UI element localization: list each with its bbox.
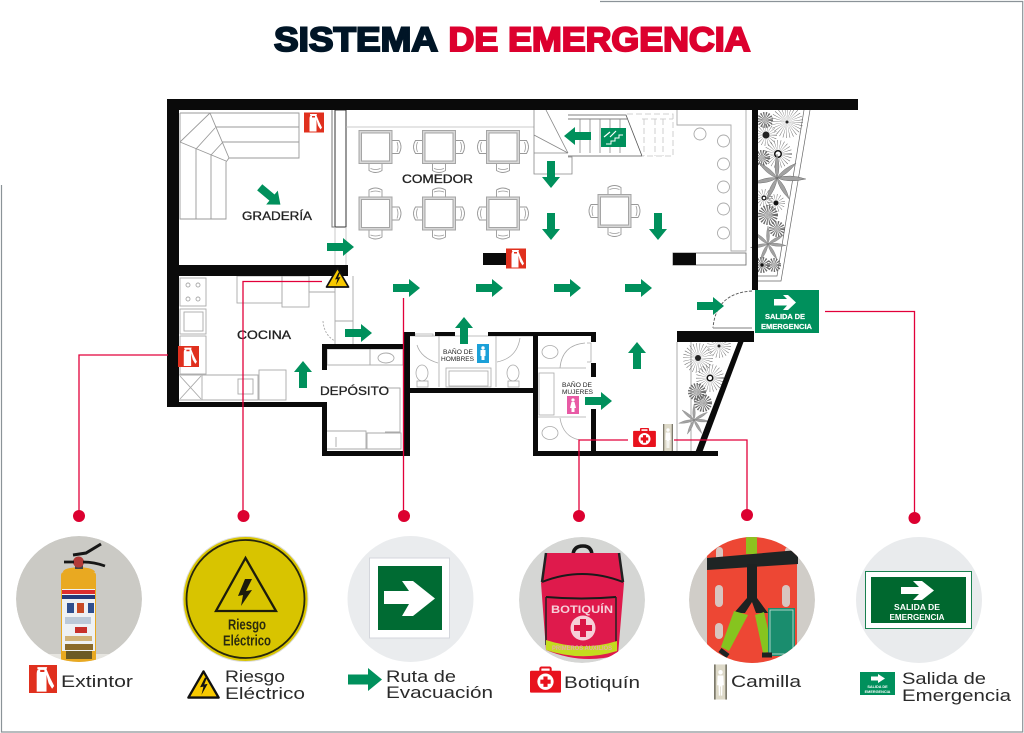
legend: ruta de evacuación: Ruta de xyxy=(386,668,456,686)
legend: botiquín: Botiquín xyxy=(564,674,640,692)
deposito fixtures xyxy=(327,349,403,449)
icon: extinguisher, gradería xyxy=(304,112,324,132)
photo: emergency exit sign xyxy=(856,537,982,663)
legend: riesgo eléctrico: Eléctrico xyxy=(225,685,305,703)
tables xyxy=(359,130,640,239)
photo: electrical risk sign xyxy=(183,536,308,662)
icon: men's restroom xyxy=(477,344,489,363)
legend: extintor xyxy=(29,665,134,693)
room labels: BAÑO DE xyxy=(443,347,474,356)
legend: riesgo eléctrico: Riesgo xyxy=(225,668,285,686)
legend: ruta de evacuación xyxy=(348,668,493,702)
photo: extinguisher xyxy=(16,536,142,664)
emergency exit sign xyxy=(755,290,819,333)
legend: camilla xyxy=(714,664,802,700)
photo: electrical risk sign: Riesgo xyxy=(228,616,266,634)
callout dots xyxy=(73,509,920,524)
icon: extinguisher, comedor xyxy=(506,248,526,268)
photo: first aid backpack: BOTIQUÍN xyxy=(551,603,613,616)
icon: stretcher xyxy=(663,424,673,451)
stairs xyxy=(534,110,673,174)
room labels: COCINA xyxy=(237,328,291,342)
photo: evacuation route sign xyxy=(348,536,474,662)
walls xyxy=(167,99,858,456)
comedor divider xyxy=(332,110,534,265)
icon: stairs exit sign xyxy=(601,128,626,147)
bathroom fixtures xyxy=(410,334,591,440)
legend: salida de emergencia: EMERGENCIA xyxy=(865,690,891,694)
room labels: COMEDOR xyxy=(402,172,473,186)
room labels: DEPÓSITO xyxy=(320,383,389,398)
callout lines xyxy=(79,282,914,518)
plant bed: top right xyxy=(750,110,810,281)
room labels: GRADERÍA xyxy=(242,208,312,223)
floor plan xyxy=(167,99,858,456)
room labels xyxy=(237,172,594,398)
kitchen fixtures xyxy=(179,265,353,400)
legend: salida de emergencia: Emergencia xyxy=(902,687,1012,705)
icon: electrical risk xyxy=(326,268,348,287)
icon: first aid kit xyxy=(633,428,656,447)
room labels: BAÑO DE xyxy=(562,380,593,389)
photo: emergency exit sign: EMERGENCIA xyxy=(890,612,944,622)
photo: first aid backpack xyxy=(519,537,645,663)
title: DE EMERGENCIA xyxy=(448,21,750,59)
graderia seating xyxy=(180,113,299,219)
emergency exit sign: SALIDA DE xyxy=(765,312,805,321)
photo: electrical risk sign: Eléctrico xyxy=(223,632,271,650)
evacuation arrows xyxy=(254,127,724,410)
legend: salida de emergencia xyxy=(860,670,1012,705)
room labels: HOMBRES xyxy=(441,356,475,363)
plant bed: bottom right xyxy=(677,340,725,451)
legend: salida de emergencia: SALIDA DE xyxy=(867,685,888,689)
title: SISTEMA xyxy=(274,21,438,59)
bar and stools xyxy=(673,110,746,265)
legend: riesgo eléctrico xyxy=(188,668,305,703)
exit door xyxy=(713,291,752,328)
photo: stretcher xyxy=(689,530,815,670)
legend: extintor: Extintor xyxy=(61,673,134,691)
photo: first aid backpack: PRIMEROS AUXILIOS xyxy=(552,645,613,652)
emergency exit sign: EMERGENCIA xyxy=(761,322,812,331)
legend: botiquín xyxy=(530,667,640,693)
room labels: MUJERES xyxy=(562,389,594,396)
legend: ruta de evacuación: Evacuación xyxy=(386,684,493,702)
title xyxy=(274,21,750,59)
icon: extinguisher, cocina xyxy=(178,346,199,367)
legend: salida de emergencia: Salida de xyxy=(902,670,986,688)
icon: women's restroom xyxy=(567,396,579,414)
legend: camilla: Camilla xyxy=(731,673,802,691)
photo: emergency exit sign: SALIDA DE xyxy=(894,602,940,612)
